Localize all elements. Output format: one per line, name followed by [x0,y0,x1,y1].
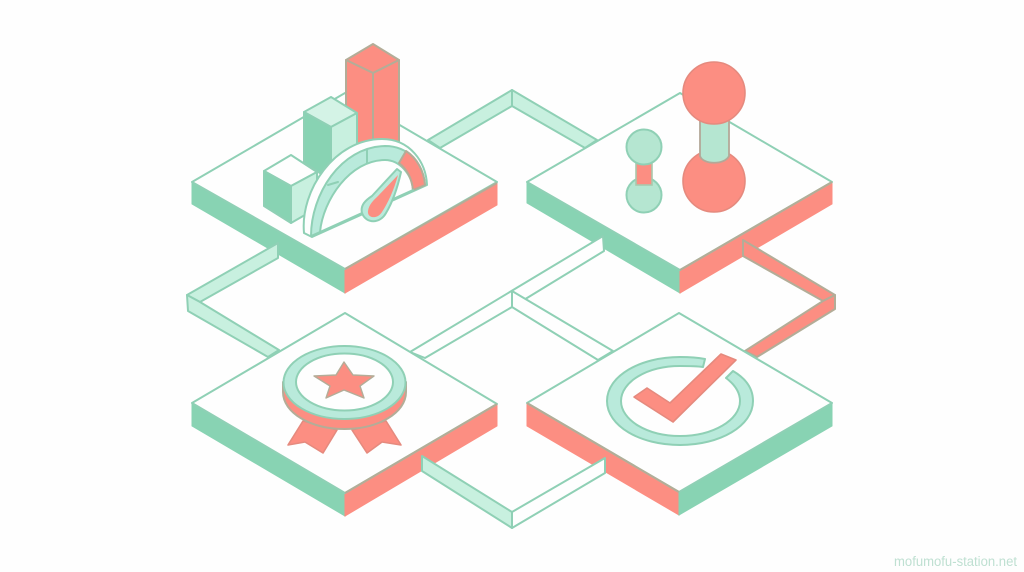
watermark text: mofumofu-station.net [894,554,1017,569]
open ring [607,357,753,445]
connector: centre [410,236,613,360]
icon: large dumbbell [683,62,745,212]
icon: green bar [304,97,357,180]
icon: red bar [346,44,399,150]
medal edge [283,382,406,429]
gauge needle [362,169,401,221]
platform: balance (top right) [527,93,832,293]
connector: right red [743,240,835,357]
icon: medal [283,346,406,453]
connector: bottom [422,456,605,528]
platform: award (bottom left) [192,313,497,516]
medal ring [284,346,406,419]
connector: top between upper platforms [428,90,597,148]
star [314,362,374,398]
icon: speedometer gauge [304,139,427,237]
icon: small cube [264,155,317,223]
check [634,354,736,422]
platform: performance (top left) [192,93,497,293]
connector: left [187,243,279,357]
icon: check mark in ring [607,354,753,445]
icon: small dumbbell [626,130,662,212]
ribbons [288,421,401,453]
platform: check (bottom right) [527,313,832,515]
